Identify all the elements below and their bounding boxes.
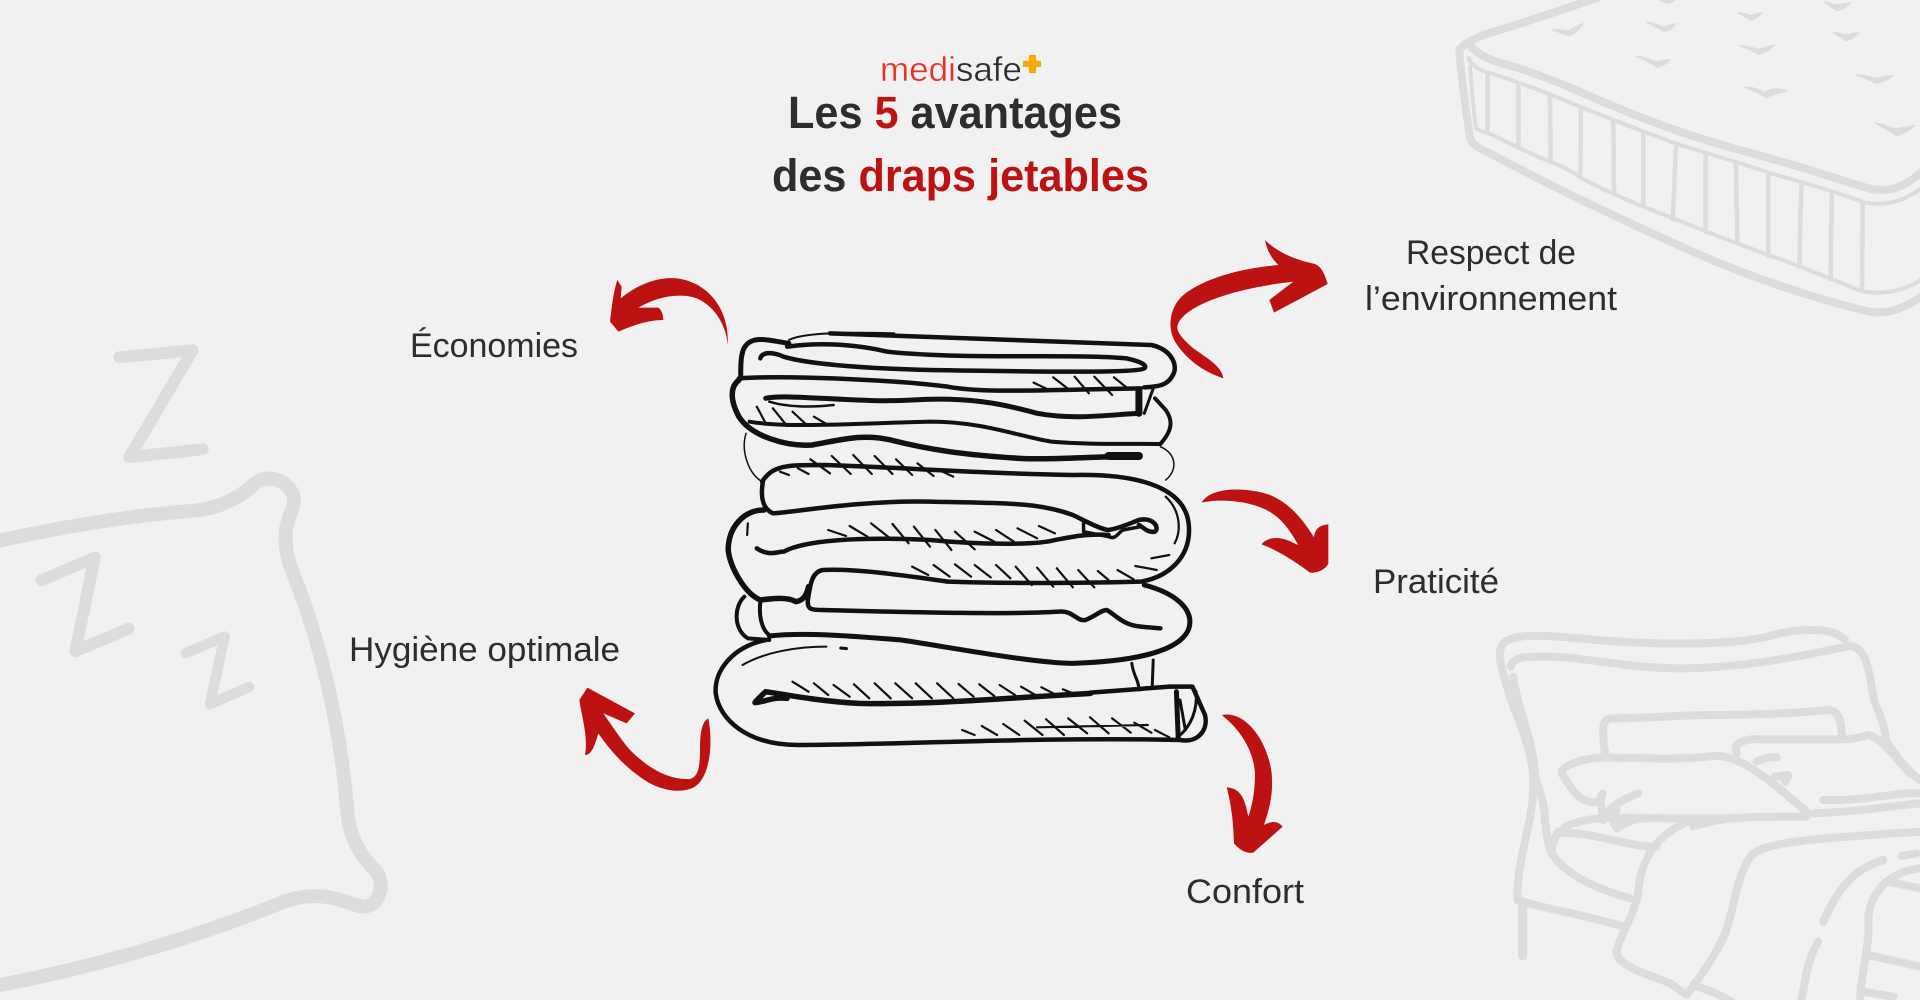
title: des draps jetables xyxy=(772,150,1149,201)
logo: medisafe: medisafe xyxy=(880,51,1022,89)
label: respect de l'environnement: l’environnement xyxy=(1365,280,1618,318)
illustration: stack of folded sheets xyxy=(716,333,1206,745)
label: economies: Économies xyxy=(410,327,578,365)
arrow: economies xyxy=(610,278,728,345)
label: respect de l'environnement: Respect de xyxy=(1406,234,1576,272)
arrow: respect de l'environnement xyxy=(1170,240,1328,378)
arrow: confort xyxy=(1222,714,1283,853)
arrow: praticite xyxy=(1202,489,1328,573)
label: respect de l'environnement xyxy=(1365,234,1618,318)
arrow: hygiene optimale xyxy=(579,688,710,791)
label: praticite: Praticité xyxy=(1373,563,1499,601)
icon: bed background xyxy=(1500,630,1920,1000)
label: confort: Confort xyxy=(1186,873,1305,911)
title xyxy=(772,87,1149,201)
label: hygiene optimale: Hygiène optimale xyxy=(349,631,620,669)
title: Les 5 avantages xyxy=(788,87,1122,138)
icon: pillow with sleep letters xyxy=(0,350,381,986)
icon: mattress background xyxy=(1459,0,1920,312)
